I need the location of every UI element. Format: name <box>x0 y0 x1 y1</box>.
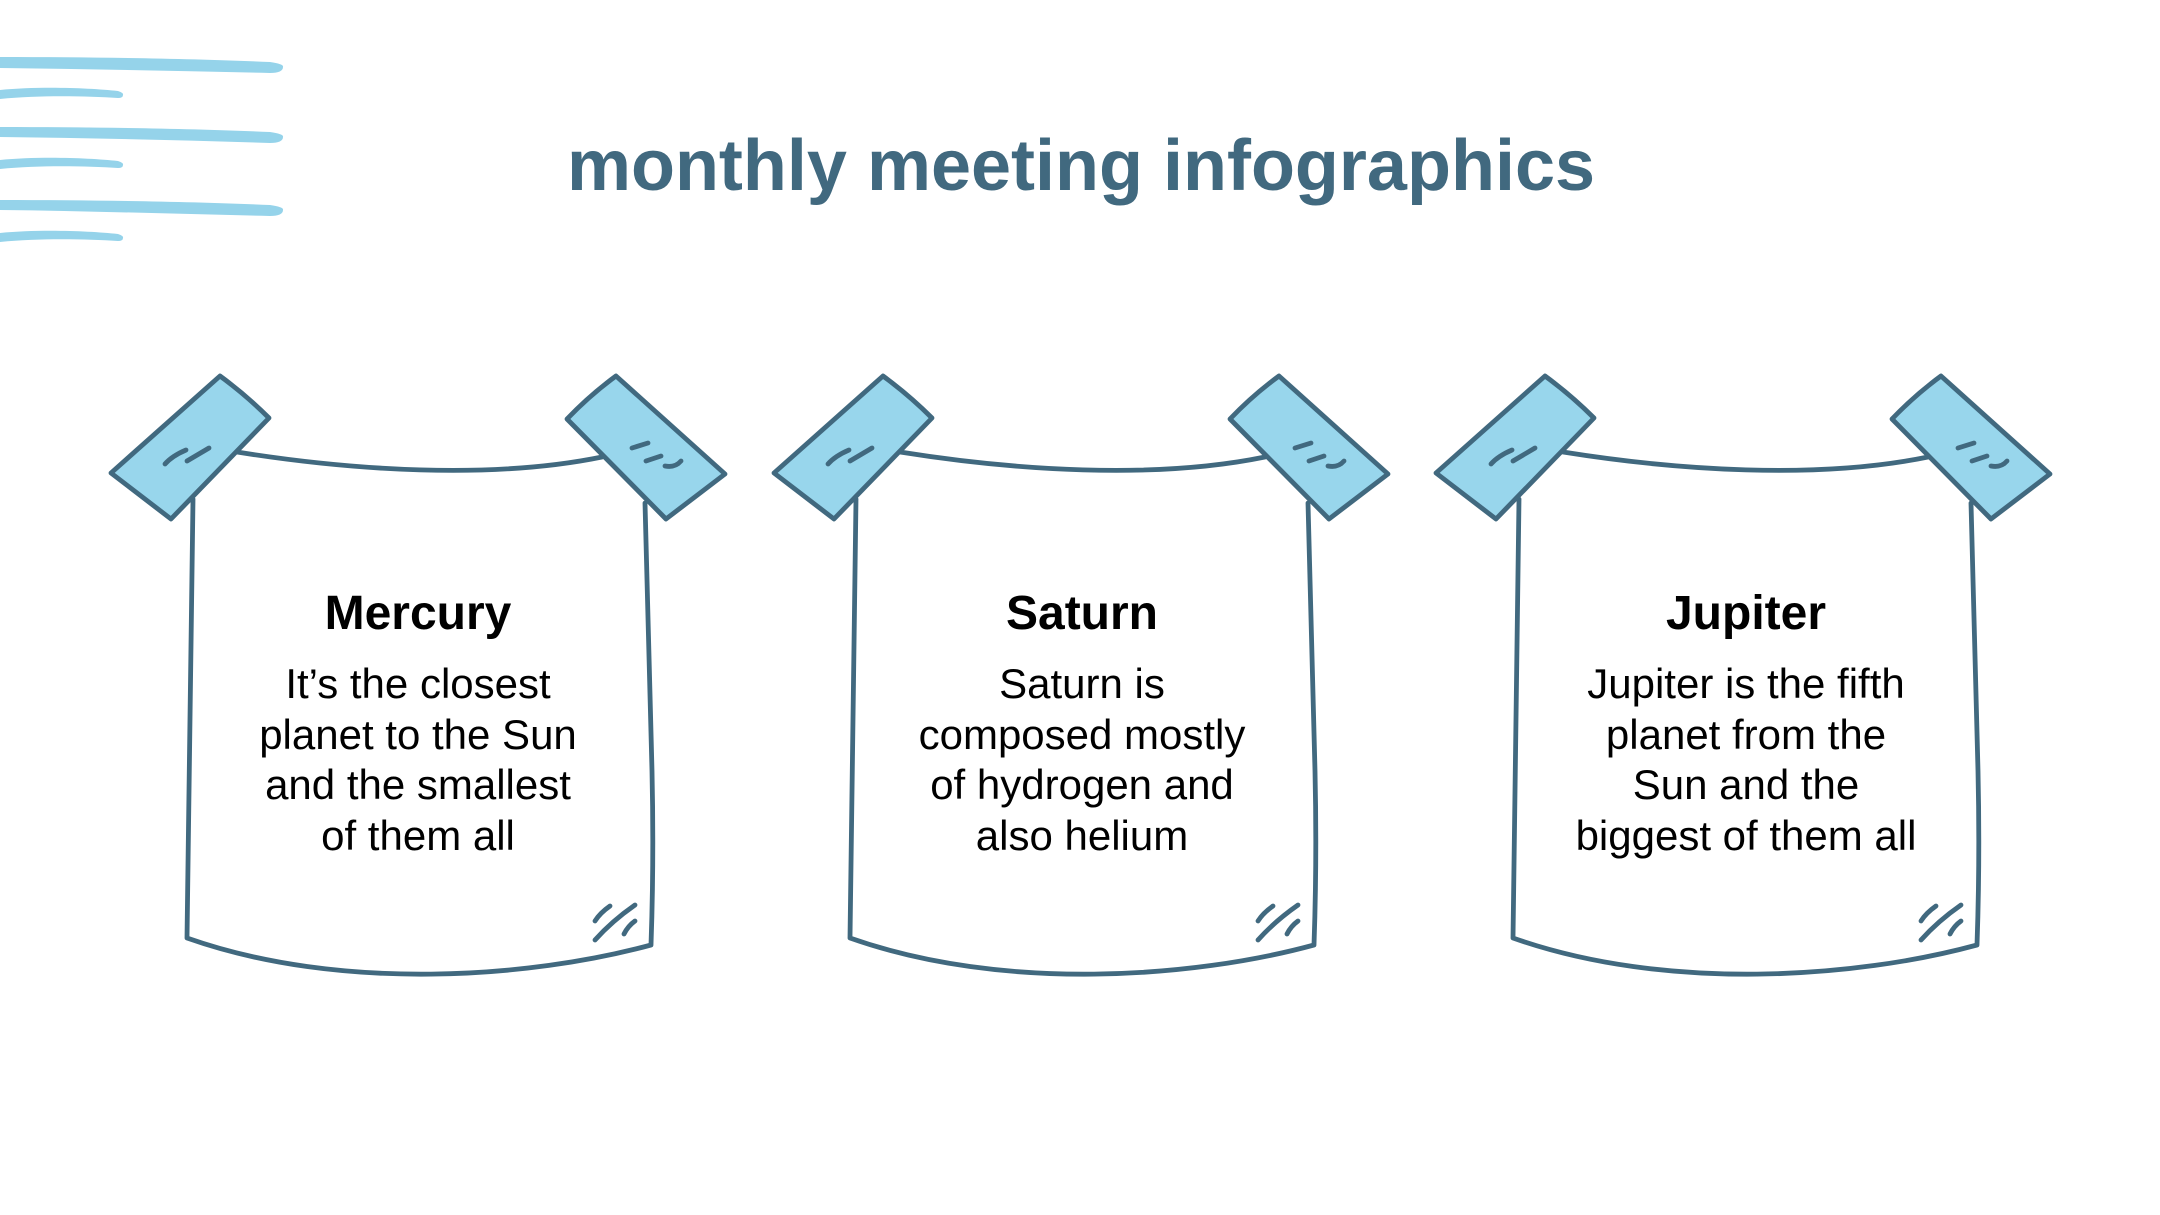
text: Mercury description: and the smallest <box>265 761 571 808</box>
decorative brush stripes <box>0 57 283 242</box>
tape: top right <box>567 376 725 519</box>
scratch marks <box>595 905 635 940</box>
panel: Jupiter <box>1436 376 2050 974</box>
panel: Saturn <box>774 376 1388 974</box>
heading: Saturn: Saturn <box>1006 587 1158 640</box>
paper outline: Jupiter <box>1513 452 1979 974</box>
text: Jupiter description: Jupiter is the fifth <box>1587 660 1905 707</box>
scratch marks <box>1921 905 1961 940</box>
tape: top left <box>1436 376 1594 519</box>
panel: Mercury <box>111 376 725 974</box>
paper outline: Mercury <box>187 452 653 974</box>
text: Saturn description: also helium <box>976 812 1188 859</box>
tape: top left <box>774 376 932 519</box>
tape: top left <box>111 376 269 519</box>
text: Jupiter description: biggest of them all <box>1576 812 1916 859</box>
scratch marks <box>1258 905 1298 940</box>
tape: top right <box>1230 376 1388 519</box>
text: Mercury description: of them all <box>321 812 515 859</box>
title: monthly meeting infographics <box>567 126 1595 206</box>
tape: top right <box>1892 376 2050 519</box>
heading: Jupiter: Jupiter <box>1666 587 1826 640</box>
paper outline: Saturn <box>850 452 1316 974</box>
text: Mercury description: It’s the closest <box>285 660 551 707</box>
text: Jupiter description: planet from the <box>1606 711 1886 758</box>
heading: Mercury: Mercury <box>325 587 512 640</box>
text: Mercury description: planet to the Sun <box>259 711 577 758</box>
text: Saturn description: composed mostly <box>919 711 1245 758</box>
text: Jupiter description: Sun and the <box>1633 761 1859 808</box>
text: Saturn description: Saturn is <box>999 660 1165 707</box>
text: Saturn description: of hydrogen and <box>930 761 1234 808</box>
